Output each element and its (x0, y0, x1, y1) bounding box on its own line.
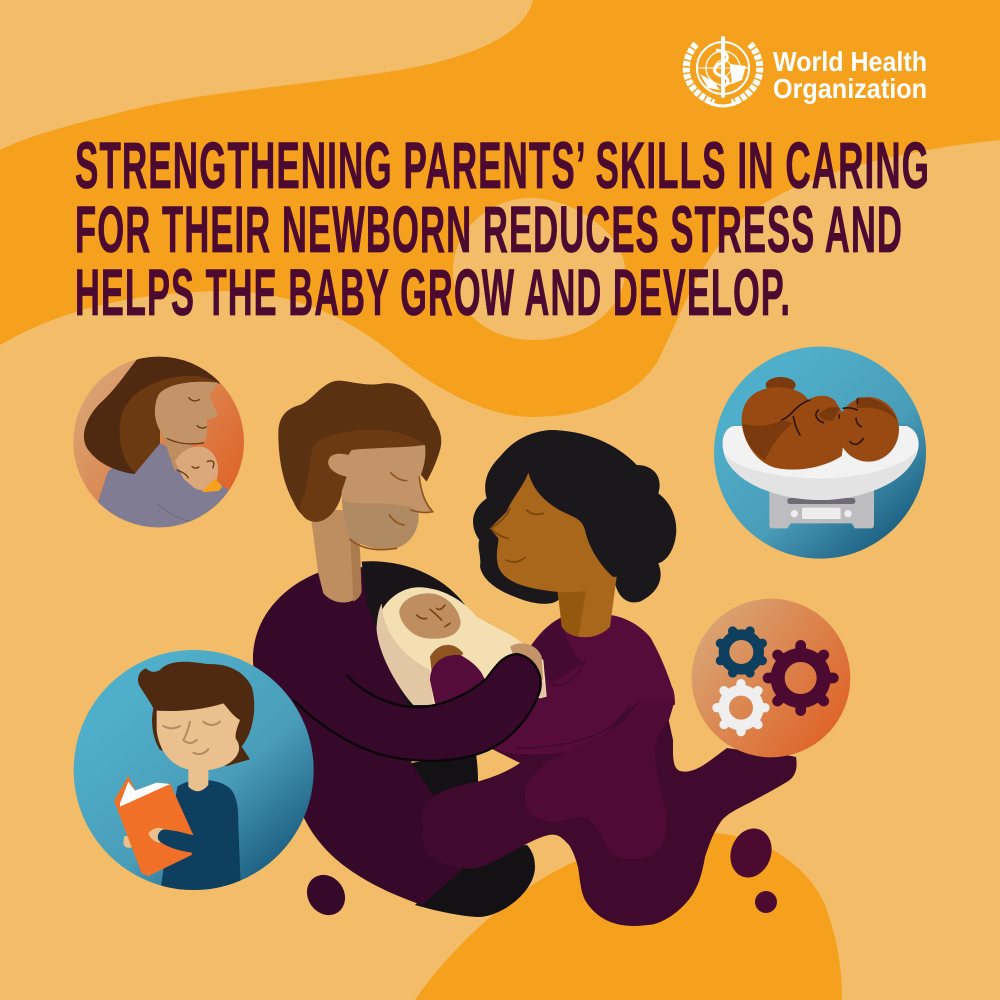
organization name (773, 46, 927, 104)
arm (148, 828, 165, 843)
circle: mother with baby in sling (73, 355, 247, 540)
logo: World Health Organization (686, 36, 927, 106)
title (75, 128, 930, 329)
man body (253, 565, 462, 905)
baby blanket (377, 587, 547, 705)
man's black shadow (362, 561, 472, 707)
beard (342, 500, 419, 549)
background orange hill (415, 832, 842, 1000)
woman arm in front (430, 655, 485, 705)
man neck (310, 510, 360, 603)
circle: gears (692, 599, 850, 757)
woman neck (557, 577, 617, 637)
upper figures (278, 381, 676, 761)
circle: baby on weighing scale (714, 347, 926, 559)
man hair (278, 381, 441, 522)
organization name: Organization (773, 73, 927, 104)
woman torso and arm (490, 615, 675, 755)
gear maroon (768, 645, 833, 711)
baby face (399, 593, 461, 639)
neck (188, 770, 208, 792)
mother body (98, 444, 228, 528)
woman lower lighter blob (525, 700, 675, 859)
hair front (120, 376, 218, 474)
organization name: World Health (773, 46, 927, 77)
neck (162, 433, 193, 472)
baby (766, 377, 796, 393)
hair (138, 662, 254, 766)
man arm (293, 654, 541, 761)
woman's blob small (755, 891, 777, 913)
woman lower body (422, 680, 797, 926)
baby head (175, 447, 218, 491)
face (155, 382, 218, 445)
woman face (490, 473, 617, 592)
scale base (769, 490, 874, 528)
black backing shapes (411, 753, 535, 917)
hand back (123, 836, 132, 848)
man face (328, 445, 433, 549)
woman's blob large (724, 823, 778, 883)
gear navy (720, 631, 762, 673)
torso (160, 780, 241, 893)
icon: WHO emblem (686, 36, 760, 106)
sling fold (134, 444, 220, 494)
circle: parent reading a book (74, 650, 314, 893)
baby blanket orange (202, 478, 222, 494)
man hair front (300, 430, 425, 522)
couple illustration (253, 381, 797, 926)
face (157, 703, 240, 771)
book (114, 776, 193, 876)
woman hair (473, 430, 676, 604)
woman sleeve shadow (530, 617, 583, 683)
hair back (84, 355, 220, 474)
gear white (717, 684, 765, 732)
scale tray (723, 426, 919, 500)
baby hand and woman's hand (510, 643, 543, 680)
background orange swoosh (0, 0, 1000, 417)
man's small blob (299, 867, 353, 923)
